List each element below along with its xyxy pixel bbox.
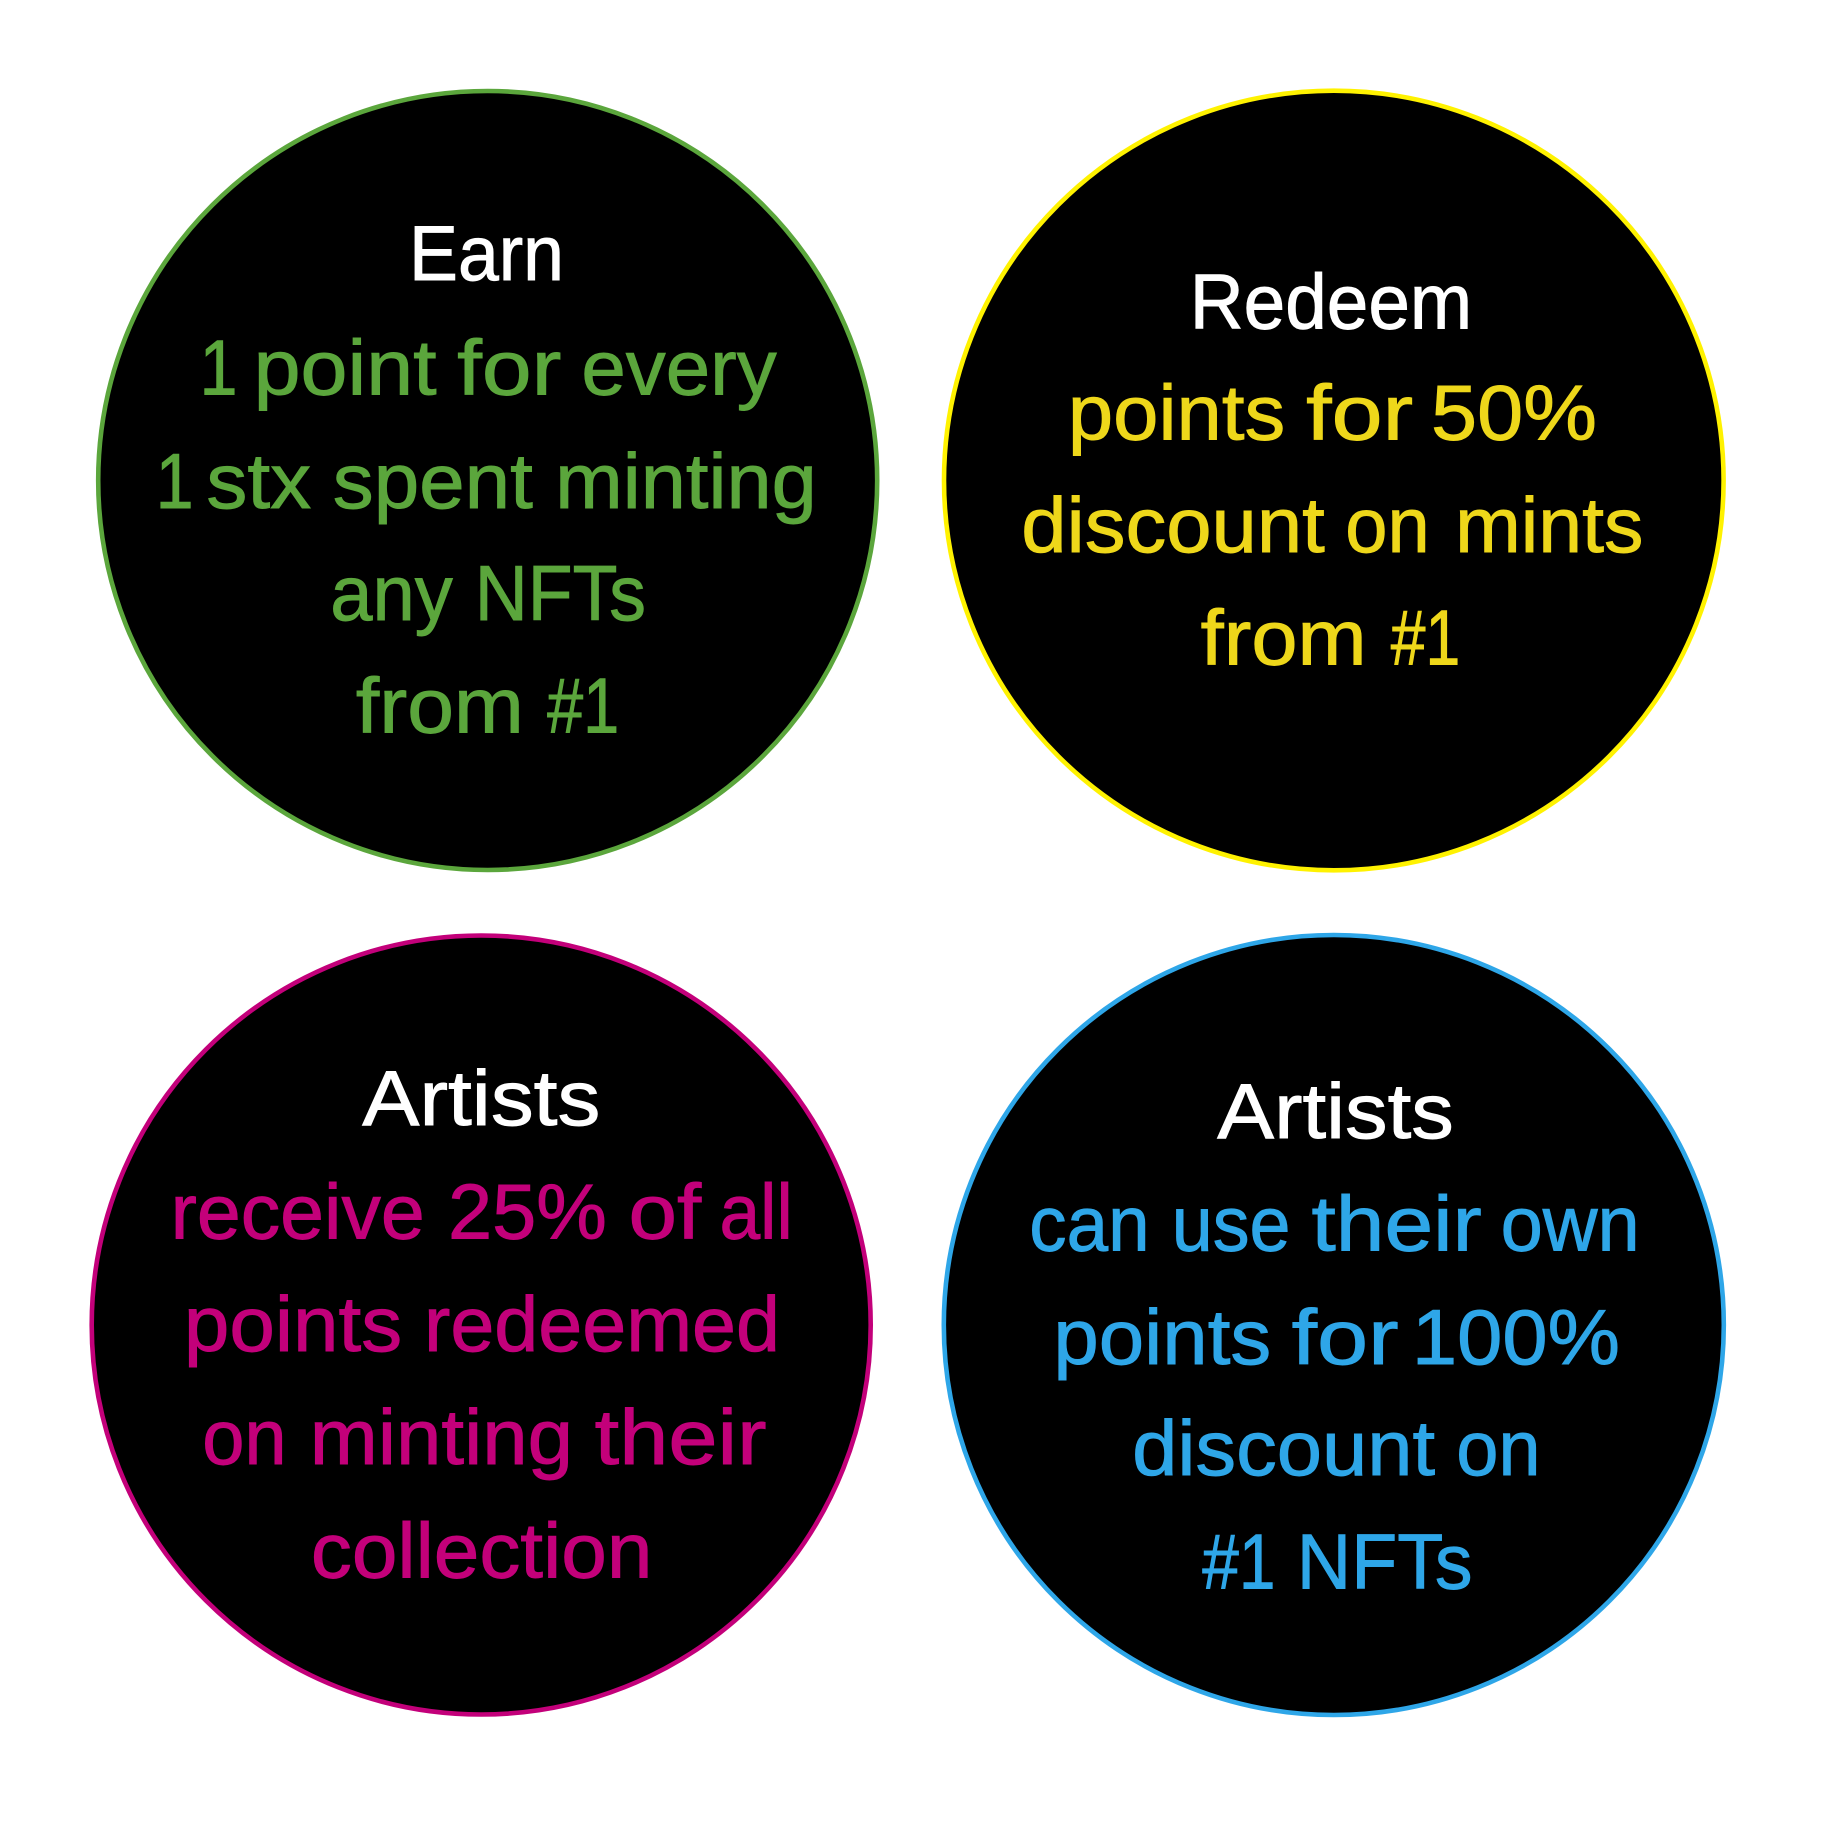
text block: earn details: #1 — [547, 662, 619, 750]
text block: earn details: minting — [555, 437, 817, 525]
text block: artists discount details: on — [1456, 1404, 1541, 1492]
text block: earn details: for — [457, 323, 561, 411]
panel: artists receive — [92, 936, 871, 1714]
text block: artists discount details: points — [1053, 1293, 1271, 1381]
text block: artists receive details: of — [628, 1167, 702, 1255]
text block: redeem details: #1 — [1391, 594, 1460, 682]
heading: Artists: Artists — [1217, 1067, 1454, 1155]
panel: artists discount — [944, 935, 1724, 1715]
text block: redeem details: discount — [1021, 481, 1325, 569]
text block: earn details: 1 — [156, 437, 194, 525]
text block: artists discount details: can — [1029, 1179, 1150, 1267]
text block: artists discount details: use — [1172, 1179, 1290, 1267]
heading: Redeem: Redeem — [1190, 257, 1472, 345]
text block: artists discount details: #1 — [1202, 1518, 1276, 1606]
text block: artists receive details: all — [720, 1167, 793, 1255]
panel: redeem — [944, 91, 1724, 870]
text block: artists receive details: their — [595, 1393, 766, 1481]
text block: artists receive details — [171, 1167, 793, 1594]
text block: artists receive details: receive — [171, 1167, 425, 1255]
text block: earn details: 1 — [200, 323, 238, 411]
text block: artists discount details: discount — [1132, 1404, 1435, 1492]
text block: earn details — [156, 323, 817, 750]
text block: artists receive details: points — [184, 1280, 402, 1368]
panel: earn — [98, 91, 877, 870]
text block: redeem details: 50% — [1431, 369, 1597, 457]
text block: earn details: spent — [333, 437, 533, 525]
text block: earn details: every — [581, 323, 777, 411]
text block: artists receive details: collection — [311, 1506, 652, 1594]
text block: artists discount details: own — [1501, 1179, 1640, 1267]
text block: artists discount details — [1029, 1179, 1640, 1606]
text block: earn details: from — [356, 662, 524, 750]
text block: earn details: stx — [206, 437, 311, 525]
text block: earn details: point — [254, 323, 437, 411]
text block: artists discount details: 100% — [1412, 1293, 1620, 1381]
text block: artists discount details: for — [1292, 1293, 1399, 1381]
text block: artists receive details: on — [202, 1393, 287, 1481]
text block: redeem details: mints — [1455, 481, 1644, 569]
text block: redeem details — [1021, 369, 1644, 682]
text block: artists receive details: minting — [310, 1393, 573, 1481]
text block: artists discount details: their — [1312, 1179, 1482, 1267]
heading: Artists: Artists — [362, 1054, 600, 1142]
text block: redeem details: points — [1068, 369, 1285, 457]
heading: Earn: Earn — [409, 209, 564, 297]
text block: artists discount details: NFTs — [1297, 1518, 1473, 1606]
text block: redeem details: for — [1306, 369, 1413, 457]
text block: earn details: NFTs — [475, 549, 646, 637]
text block: artists receive details: 25% — [448, 1167, 607, 1255]
text block: redeem details: on — [1345, 481, 1430, 569]
text block: artists receive details: redeemed — [424, 1280, 780, 1368]
text block: earn details: any — [330, 549, 453, 637]
text block: redeem details: from — [1201, 594, 1367, 682]
